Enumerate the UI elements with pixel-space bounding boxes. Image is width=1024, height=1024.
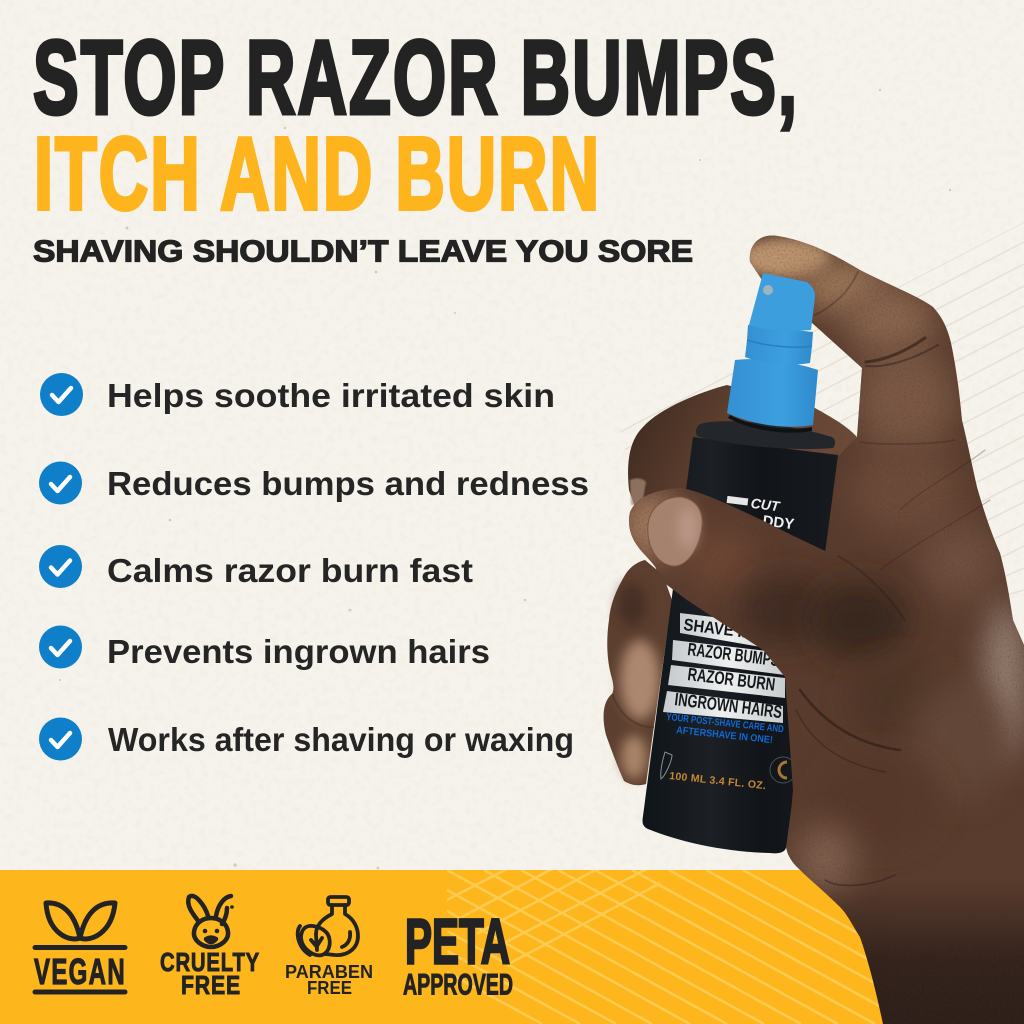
badge: paraben free: PARABEN [285, 962, 373, 982]
label strips: SHAVE INTO [683, 615, 774, 645]
benefit: soothe [40, 373, 555, 416]
hand holding spray bottle [600, 220, 1024, 1024]
badge: vegan [34, 903, 126, 992]
benefit: waxing: Works after shaving or waxing [108, 721, 574, 758]
badge: peta approved: APPROVED [403, 968, 513, 1002]
back fingers [628, 385, 857, 580]
blue tagline: AFTERSHAVE IN ONE! [676, 725, 773, 746]
benefit: ingrown: Prevents ingrown hairs [107, 633, 490, 670]
blue tagline: YOUR POST-SHAVE CARE AND [666, 712, 784, 735]
badge: paraben free: FREE [307, 978, 352, 998]
badge: cruelty free: CRUELTY [160, 947, 260, 977]
lower left fingers [604, 560, 672, 785]
bottle seal icon [661, 752, 796, 783]
badge: peta approved: PETA [405, 906, 510, 978]
benefit: bumps: Reduces bumps and redness [107, 465, 589, 502]
spray bottle [643, 273, 838, 853]
benefit: razor burn [39, 545, 473, 589]
badge: cruelty free: FREE [181, 970, 241, 1000]
bottle collar [696, 421, 835, 449]
spray nozzle [763, 285, 773, 295]
thumb and lower palm [628, 488, 906, 867]
label strips: RAZOR BUMPS [687, 639, 780, 670]
benefit: soothe: Helps soothe irritated skin [107, 377, 555, 414]
badge: paraben free [285, 897, 373, 998]
thumbnail [648, 497, 702, 566]
subtitle: SHAVING SHOULDN’T LEAVE YOU SORE [33, 234, 693, 268]
bottle brand: DDY [762, 512, 795, 533]
benefit list [39, 373, 589, 760]
bottle brand: CUT [750, 495, 782, 514]
faint line pattern behind hand [620, 222, 1024, 614]
volume text: 100 ML 3.4 FL. OZ. [669, 770, 766, 792]
badge: peta approved [403, 906, 513, 1002]
pump actuator [749, 273, 815, 331]
benefit: razor burn: Calms razor burn fast [107, 552, 473, 589]
label strips [663, 613, 785, 723]
badge: cruelty free [160, 896, 260, 1000]
blue tagline [666, 712, 784, 746]
bottle body [643, 437, 838, 853]
hand and index finger [750, 236, 1024, 1024]
label strips: RAZOR BURN [687, 664, 776, 695]
badge: vegan: VEGAN [34, 951, 126, 992]
pump base [727, 359, 818, 427]
pump mid [745, 325, 813, 365]
yellow footer band [0, 870, 883, 1024]
title line 2: ITCH AND BURN [34, 116, 601, 231]
label strips: INGROWN HAIRS [674, 689, 783, 722]
bottle brand [724, 492, 797, 533]
benefit: ingrown [39, 626, 490, 670]
